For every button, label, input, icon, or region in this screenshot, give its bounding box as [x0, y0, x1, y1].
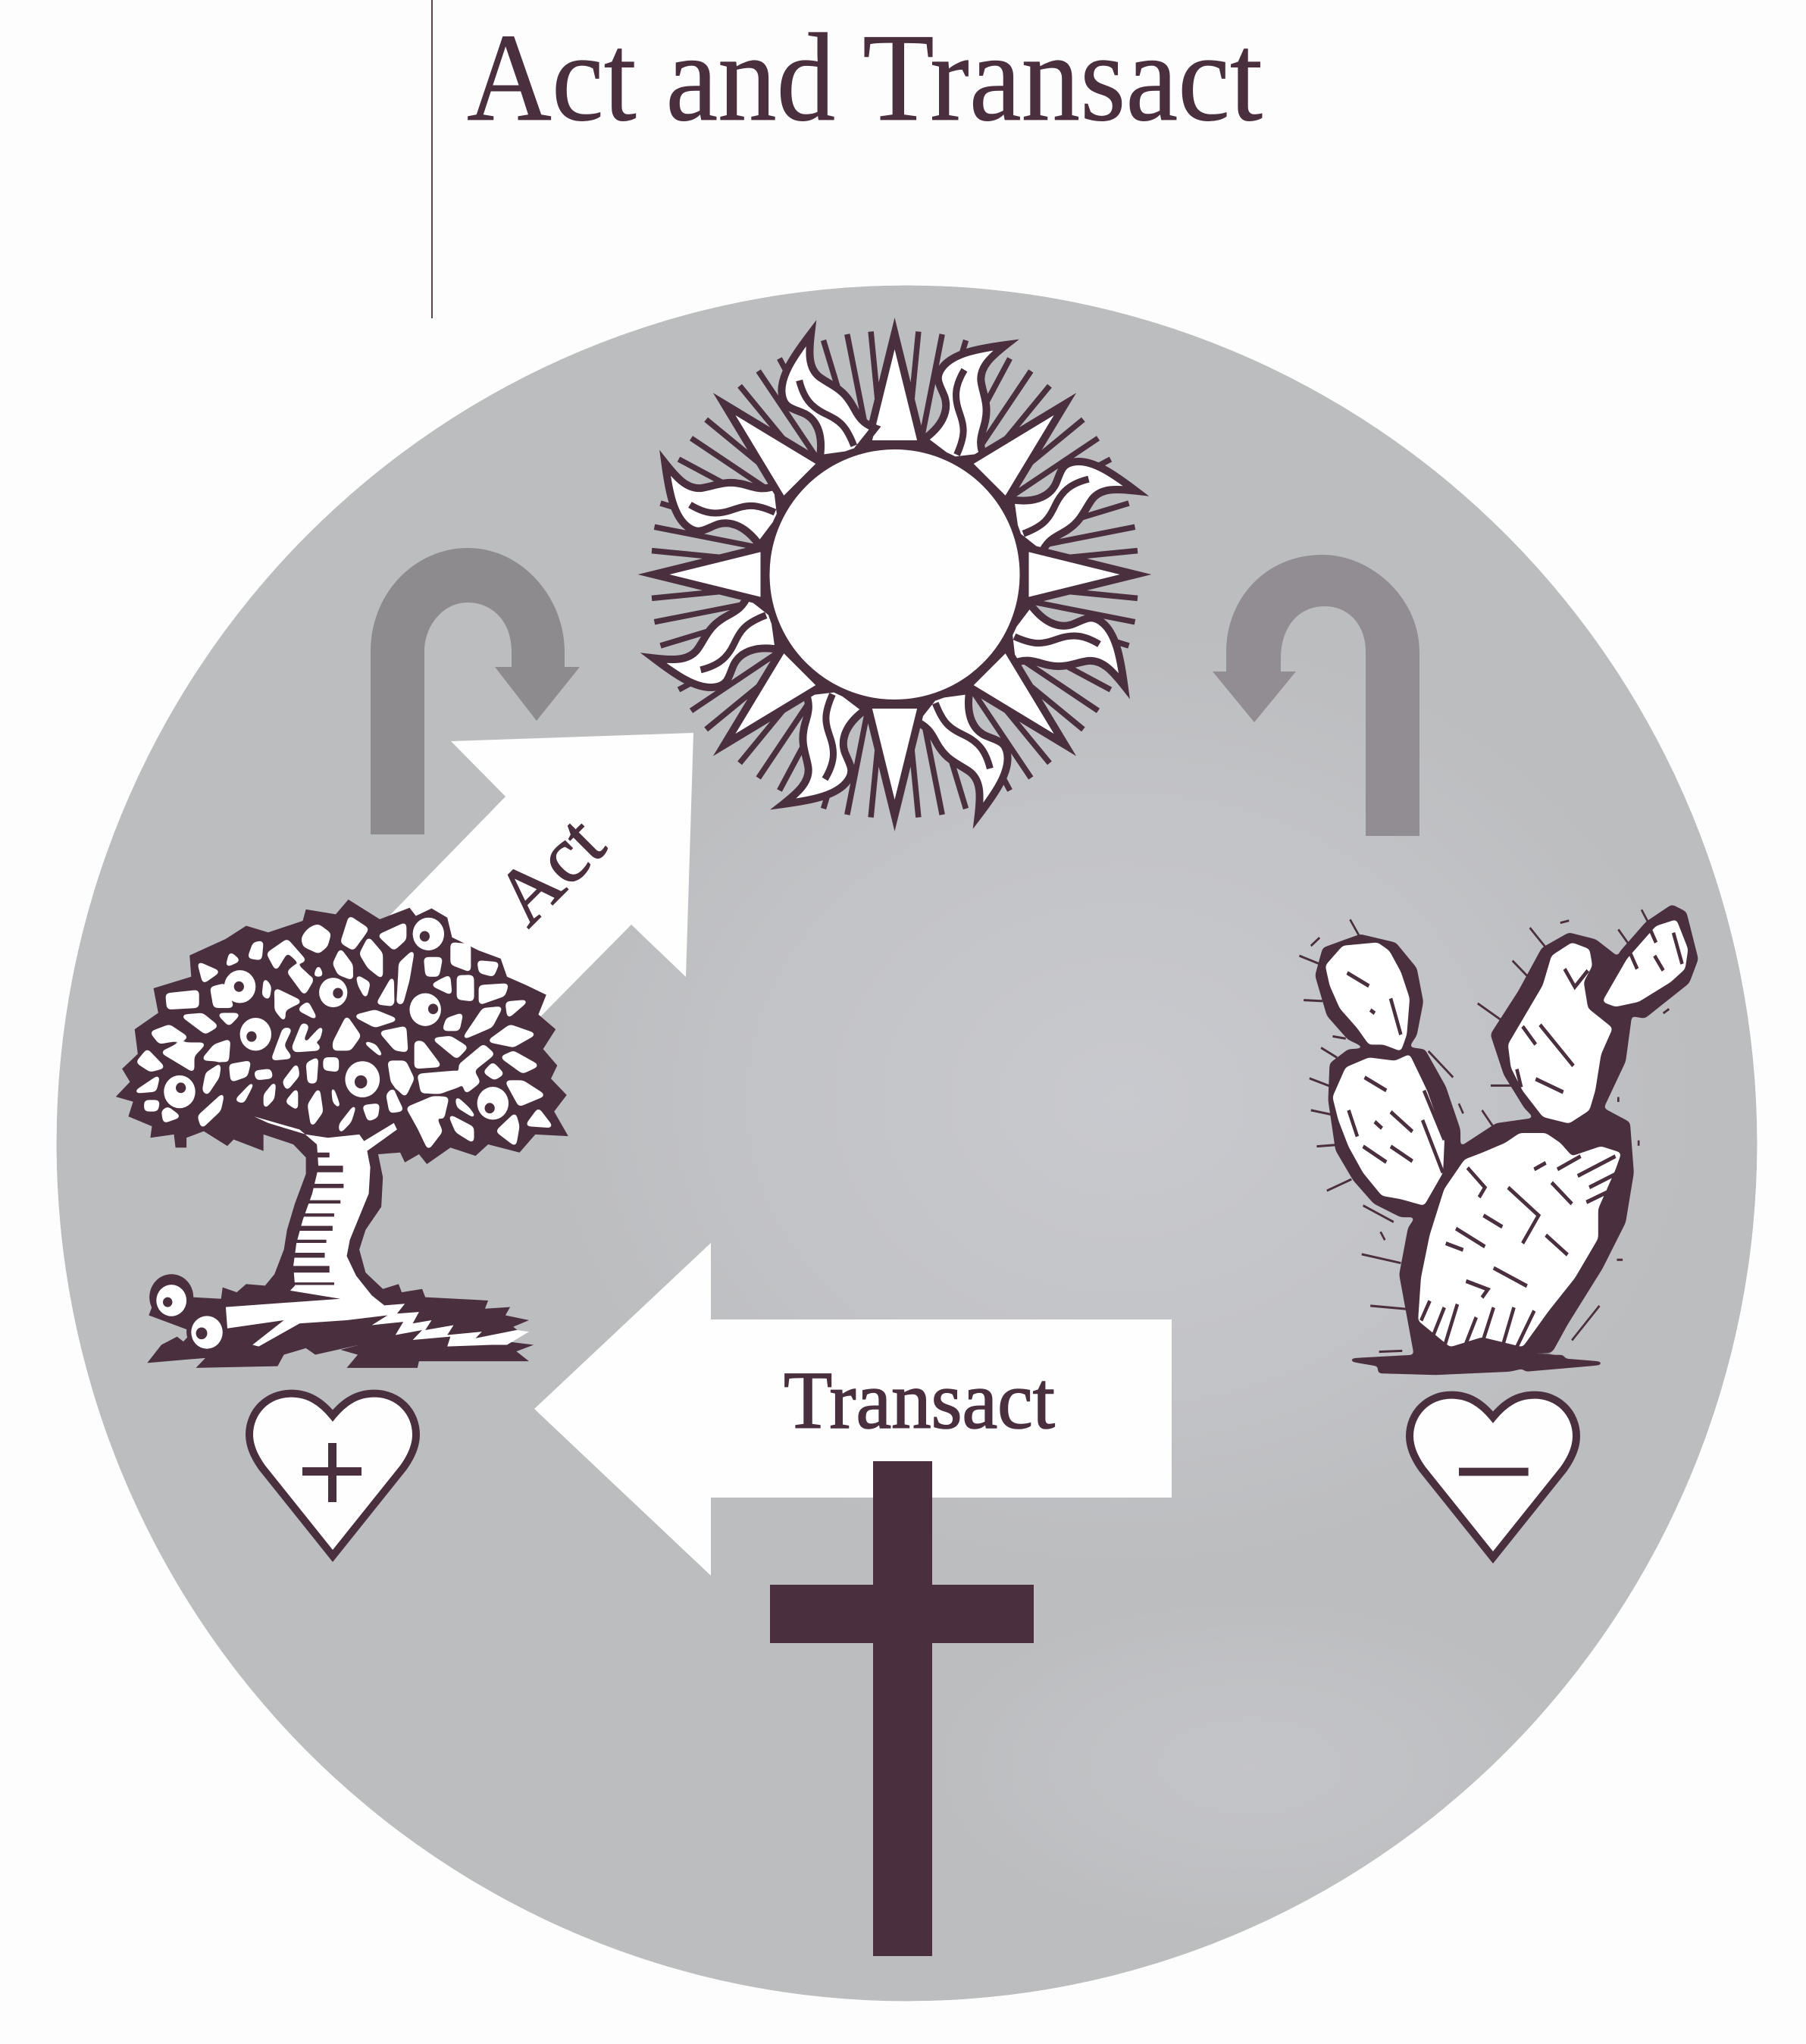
tree trunk stripes	[290, 1153, 343, 1285]
arrow: Transact	[534, 1243, 1172, 1576]
cactus marks	[1347, 929, 1682, 1347]
icon: tree	[116, 900, 568, 1368]
icon: heart plus	[249, 1394, 416, 1556]
minus sign	[1459, 1468, 1529, 1476]
plus sign	[302, 1443, 362, 1502]
arrow: left curved arrow	[371, 548, 580, 834]
icon: sun	[646, 325, 1144, 824]
label: Act: Act	[478, 798, 621, 941]
tree trunk and ground highlight	[226, 1116, 529, 1347]
label: Transact: Transact	[784, 1356, 1055, 1446]
arrow: Act	[356, 733, 693, 1042]
cactus pads	[1326, 919, 1688, 1347]
icon: heart minus	[1410, 1395, 1576, 1557]
panel: grey circle background	[56, 285, 1757, 2001]
title: Act and Transact	[467, 8, 1263, 147]
tree leaves	[136, 918, 551, 1147]
arrow: right curved arrow	[1213, 555, 1419, 836]
icon: cactus	[1299, 906, 1697, 1373]
cactus outlines	[1316, 906, 1697, 1373]
vertical rule	[431, 0, 433, 318]
icon: cross	[770, 1461, 1034, 1956]
cactus spines	[1299, 909, 1669, 1352]
tree fruits	[149, 918, 509, 1353]
